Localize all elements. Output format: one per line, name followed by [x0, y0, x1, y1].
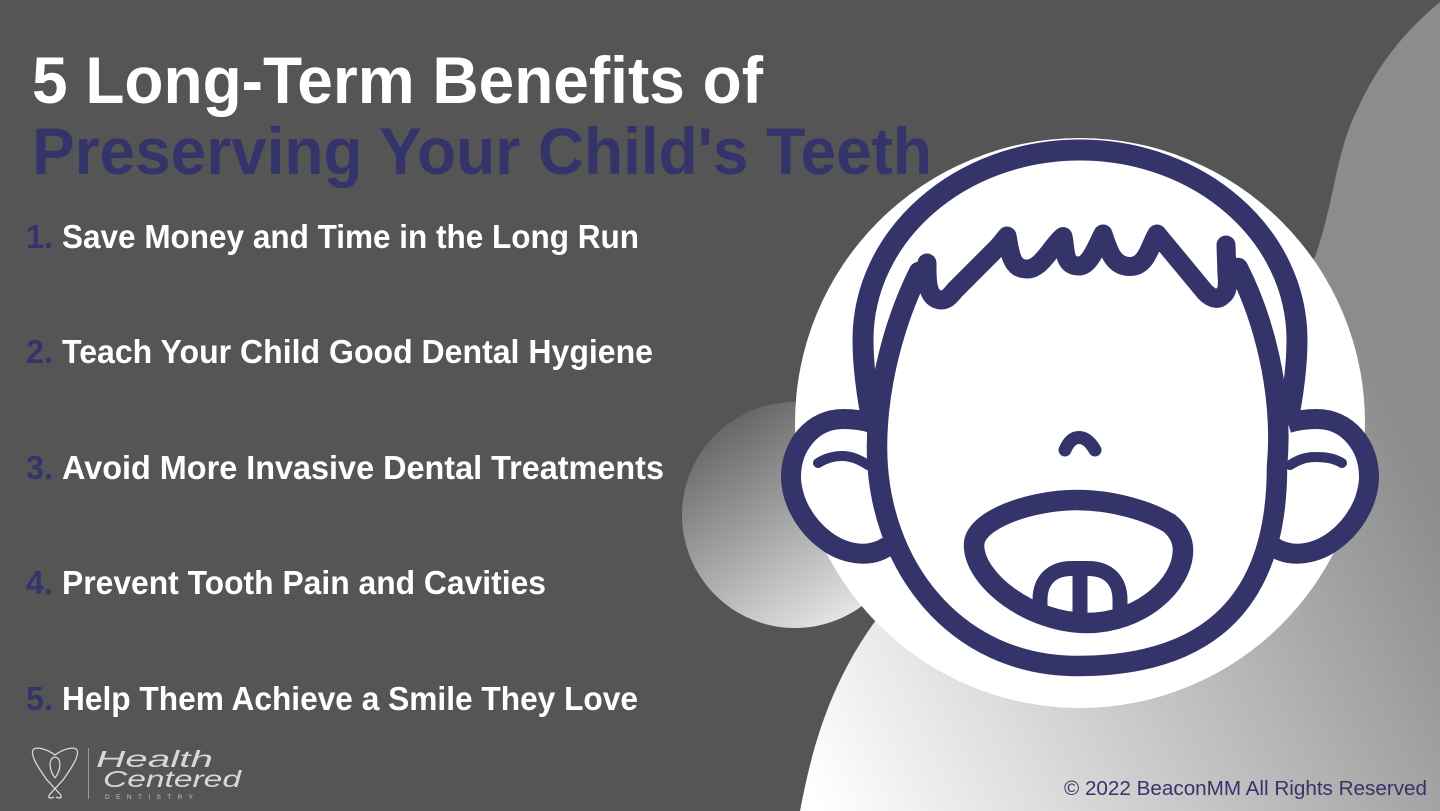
logo wordmark Dentistry: DENTISTRY	[105, 794, 194, 801]
logo tooth mark	[32, 748, 78, 798]
item 2: Teach Your Child Good Dental Hygiene	[62, 333, 653, 370]
teeth outline	[1040, 568, 1120, 612]
item 2: 2.	[26, 333, 53, 370]
benefits list	[26, 218, 664, 717]
item 1: 1.	[26, 218, 53, 255]
item 5: 5.	[26, 680, 53, 717]
item 4: 4.	[26, 564, 53, 601]
nose	[1065, 438, 1095, 450]
item 1: Save Money and Time in the Long Run	[62, 218, 639, 255]
white circle behind face	[795, 138, 1365, 708]
decorative gradient blob	[800, 2, 1440, 811]
title line 2: Preserving Your Child's Teeth	[32, 114, 932, 188]
hair outline arc	[863, 150, 1297, 425]
copyright: © 2022 BeaconMM All Rights Reserved	[1064, 778, 1427, 800]
item 3: 3.	[26, 449, 53, 486]
decorative gradient circle	[682, 402, 908, 628]
item 5: Help Them Achieve a Smile They Love	[62, 680, 638, 717]
title	[32, 43, 932, 188]
logo wordmark Centered: Centered	[103, 766, 243, 792]
right ear	[1272, 419, 1369, 554]
left ear detail	[818, 456, 868, 465]
logo divider	[88, 748, 89, 799]
logo: Health Centered Dentistry	[32, 746, 243, 801]
tooth divider	[1072, 568, 1088, 622]
item 3: Avoid More Invasive Dental Treatments	[62, 449, 664, 486]
icon: child face with two teeth	[791, 150, 1369, 666]
right ear detail	[1290, 457, 1342, 465]
title line 1: 5 Long-Term Benefits of	[32, 43, 764, 117]
item 4: Prevent Tooth Pain and Cavities	[62, 564, 546, 601]
face outline	[877, 268, 1278, 666]
logo wordmark Health: Health	[96, 746, 213, 772]
mouth	[974, 500, 1183, 623]
hair fringe	[927, 234, 1227, 300]
left ear	[791, 419, 888, 554]
